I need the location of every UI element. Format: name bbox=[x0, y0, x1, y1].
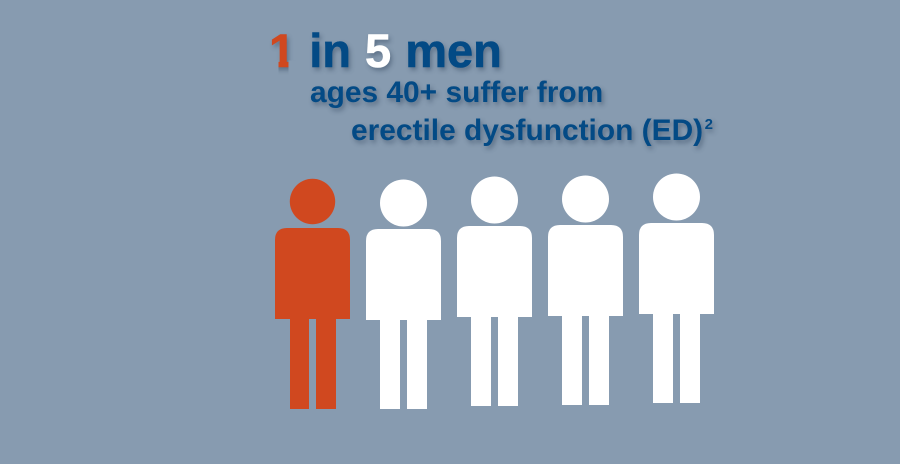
subtitle line 2: erectile dysfunction (ED)2 bbox=[351, 114, 713, 146]
title: 1 in 5 men: 1 bbox=[269, 24, 295, 77]
subtitle line 1: ages 40+ suffer from bbox=[310, 76, 603, 109]
title: 1 in 5 men: in 5 men bbox=[309, 24, 502, 77]
icon: white man 2 bbox=[457, 176, 532, 406]
icon: white man 4 bbox=[639, 174, 714, 403]
icon: red man bbox=[275, 179, 350, 409]
icon: white man 3 bbox=[548, 176, 623, 405]
icon: white man 1 bbox=[366, 180, 441, 409]
